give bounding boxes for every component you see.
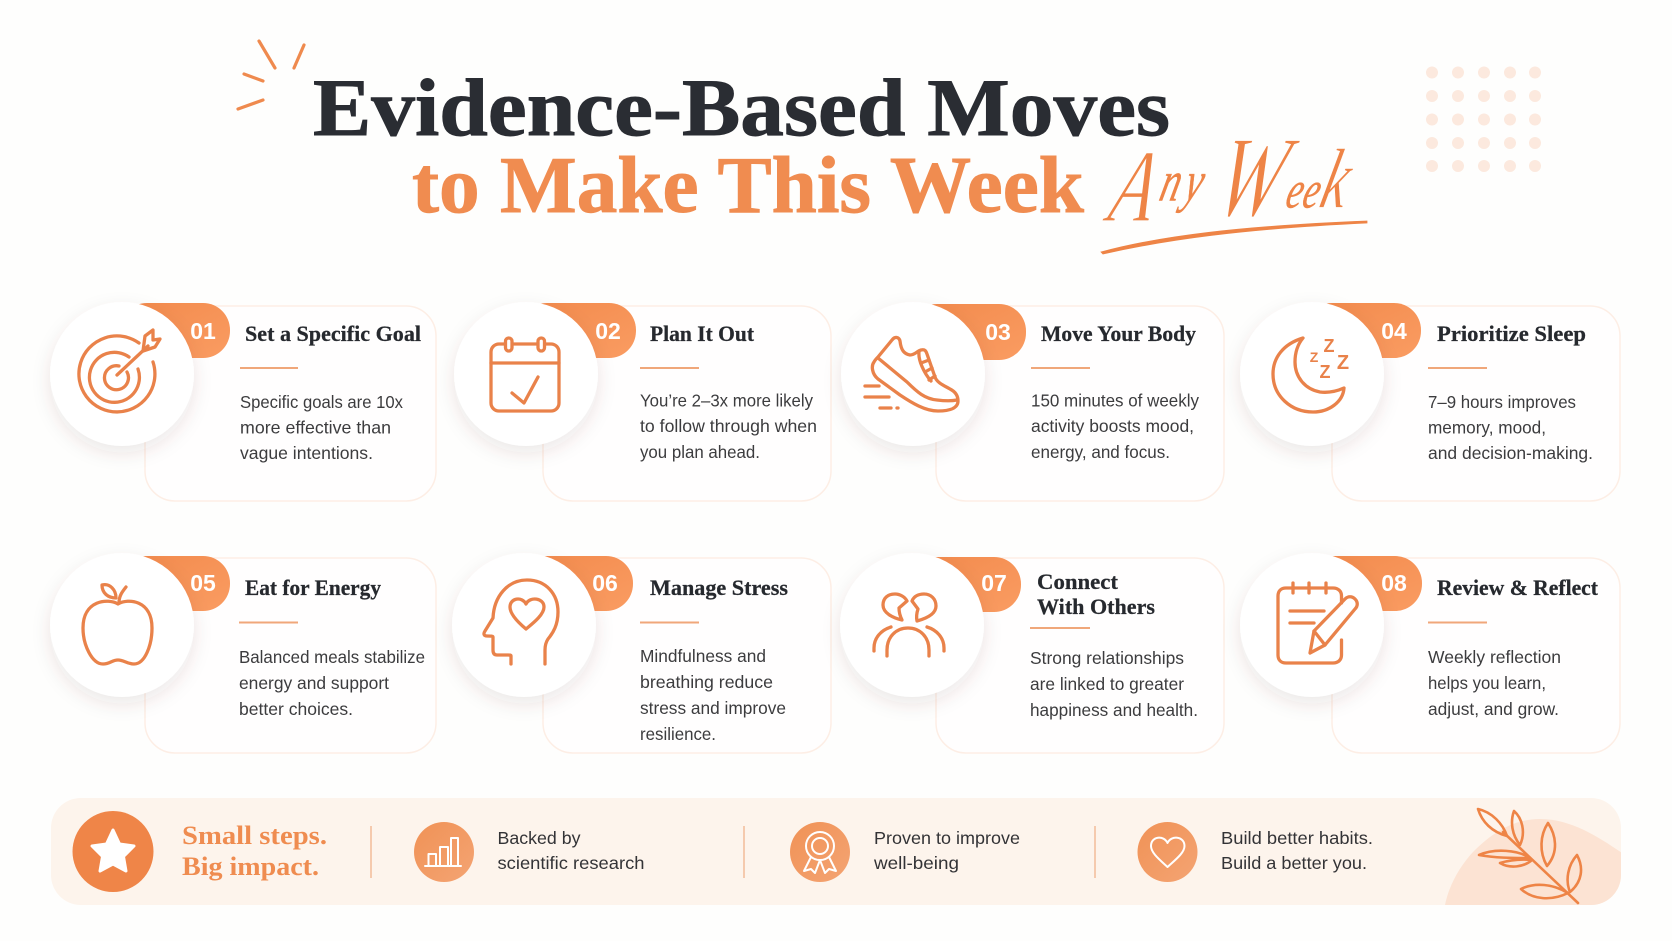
card 3: Move Your Body: activity boosts mood, — [1031, 416, 1194, 436]
card 5: Eat for Energy: 05 — [190, 570, 216, 596]
icon: moon and z: Z — [1337, 352, 1349, 374]
card 1: Set a Specific Goal: vague intentions. — [240, 443, 373, 463]
card 3: Move Your Body: 03 — [985, 319, 1011, 345]
card 2: Plan It Out: Plan It Out — [650, 321, 755, 346]
card 8: Review & Reflect: adjust, and grow. — [1428, 699, 1559, 719]
card 8: Review & Reflect: Weekly reflection — [1428, 647, 1561, 667]
card 1: Set a Specific Goal — [50, 302, 436, 501]
decorative sparks — [238, 41, 304, 109]
footer item: well-being — [790, 822, 1020, 882]
card 5: Eat for Energy — [50, 553, 436, 753]
card 4: Prioritize Sleep: 7–9 hours improves — [1428, 392, 1576, 412]
script underline — [1101, 221, 1367, 254]
star badge — [72, 811, 154, 892]
icon: moon and z: Z — [1320, 362, 1330, 382]
footer item: well-being: well-being — [873, 853, 959, 873]
icon: target — [79, 330, 160, 412]
script accent: Any Week: A — [1096, 130, 1172, 244]
footer item: habits: Build better habits. — [1221, 828, 1373, 848]
title line 2: to Make This Week — [412, 142, 1085, 230]
script accent: Any Week: W — [1205, 113, 1308, 241]
dot grid — [1426, 66, 1541, 172]
script accent: Any Week: k — [1312, 133, 1363, 227]
card 1: Set a Specific Goal: more effective than — [240, 418, 391, 438]
card 6: Manage Stress: breathing reduce — [640, 672, 773, 692]
card 7: Connect With Others: Strong relationships — [1030, 648, 1184, 668]
footer item: habits: Build a better you. — [1221, 853, 1367, 873]
card 4: Prioritize Sleep: and decision-making. — [1428, 443, 1593, 463]
card 8: Review & Reflect: helps you learn, — [1428, 673, 1546, 693]
card 3: Move Your Body: 150 minutes of weekly — [1031, 390, 1199, 410]
card 6: Manage Stress: Manage Stress — [650, 575, 788, 600]
footer item: research: Backed by — [498, 828, 581, 848]
icon: apple — [83, 585, 152, 664]
icon: running shoe — [865, 337, 958, 411]
card 6: Manage Stress: Mindfulness and — [640, 646, 766, 666]
footer item: research: scientific research — [498, 853, 644, 873]
card 7: Connect With Others: Connect — [1037, 569, 1119, 594]
script accent: Any Week: ee — [1281, 160, 1329, 219]
card 1: Set a Specific Goal: 01 — [190, 318, 216, 344]
card 7: Connect With Others: 07 — [981, 570, 1007, 596]
card 7: Connect With Others: With Others — [1037, 594, 1155, 619]
card 8: Review & Reflect: Review & Reflect — [1437, 575, 1599, 600]
footer item: well-being: Proven to improve — [874, 828, 1020, 848]
card 5: Eat for Energy: Balanced meals stabilize — [239, 647, 425, 667]
card 8: Review & Reflect: 08 — [1381, 570, 1407, 596]
tagline: Big impact. — [182, 851, 319, 881]
card 4: Prioritize Sleep: 04 — [1381, 318, 1407, 344]
card 7: Connect With Others: happiness and health. — [1030, 700, 1198, 720]
card 2: Plan It Out: you plan ahead. — [640, 442, 760, 462]
leaf sprig — [1478, 809, 1581, 903]
card 4: Prioritize Sleep: memory, mood, — [1428, 418, 1546, 438]
card 5: Eat for Energy: Eat for Energy — [245, 575, 381, 600]
icon: moon and z — [1273, 336, 1349, 412]
icon: two people — [874, 594, 944, 656]
card 6: Manage Stress — [452, 553, 831, 753]
card 2: Plan It Out: to follow through when — [640, 416, 817, 436]
icon: moon and z: Z — [1310, 349, 1319, 365]
card 3: Move Your Body: Move Your Body — [1041, 321, 1196, 346]
card 4: Prioritize Sleep — [1240, 302, 1620, 501]
card 5: Eat for Energy: energy and support — [239, 673, 389, 693]
icon: calendar — [491, 338, 559, 411]
icon: notepad and pencil — [1278, 583, 1357, 663]
card 6: Manage Stress: stress and improve — [640, 698, 786, 718]
card 7: Connect With Others — [840, 553, 1224, 753]
card 8: Review & Reflect — [1240, 553, 1620, 753]
card 1: Set a Specific Goal: Specific goals are 10x — [240, 392, 403, 412]
tagline: Small steps. — [182, 820, 327, 850]
script accent: Any Week: ny — [1155, 149, 1231, 213]
card 3: Move Your Body — [841, 302, 1224, 501]
card 1: Set a Specific Goal: Set a Specific Goal — [245, 321, 421, 346]
tagline — [182, 820, 327, 881]
footer item: research — [414, 822, 644, 882]
card 6: Manage Stress: resilience. — [640, 724, 716, 744]
card 4: Prioritize Sleep: Prioritize Sleep — [1437, 321, 1586, 346]
card 6: Manage Stress: 06 — [592, 570, 618, 596]
footer item: habits — [1138, 822, 1373, 882]
card 5: Eat for Energy: better choices. — [239, 699, 353, 719]
card 3: Move Your Body: energy, and focus. — [1031, 442, 1170, 462]
footer panel — [51, 798, 1625, 905]
icon: moon and z: Z — [1324, 336, 1334, 356]
card 2: Plan It Out: 02 — [595, 318, 621, 344]
card 7: Connect With Others: are linked to greater — [1030, 674, 1184, 694]
footer blob — [1445, 819, 1625, 905]
title line 1: Evidence-Based Moves — [313, 62, 1170, 153]
icon: head with heart — [484, 580, 558, 664]
card 2: Plan It Out — [454, 302, 831, 501]
card 2: Plan It Out: You’re 2–3x more likely — [640, 390, 813, 410]
